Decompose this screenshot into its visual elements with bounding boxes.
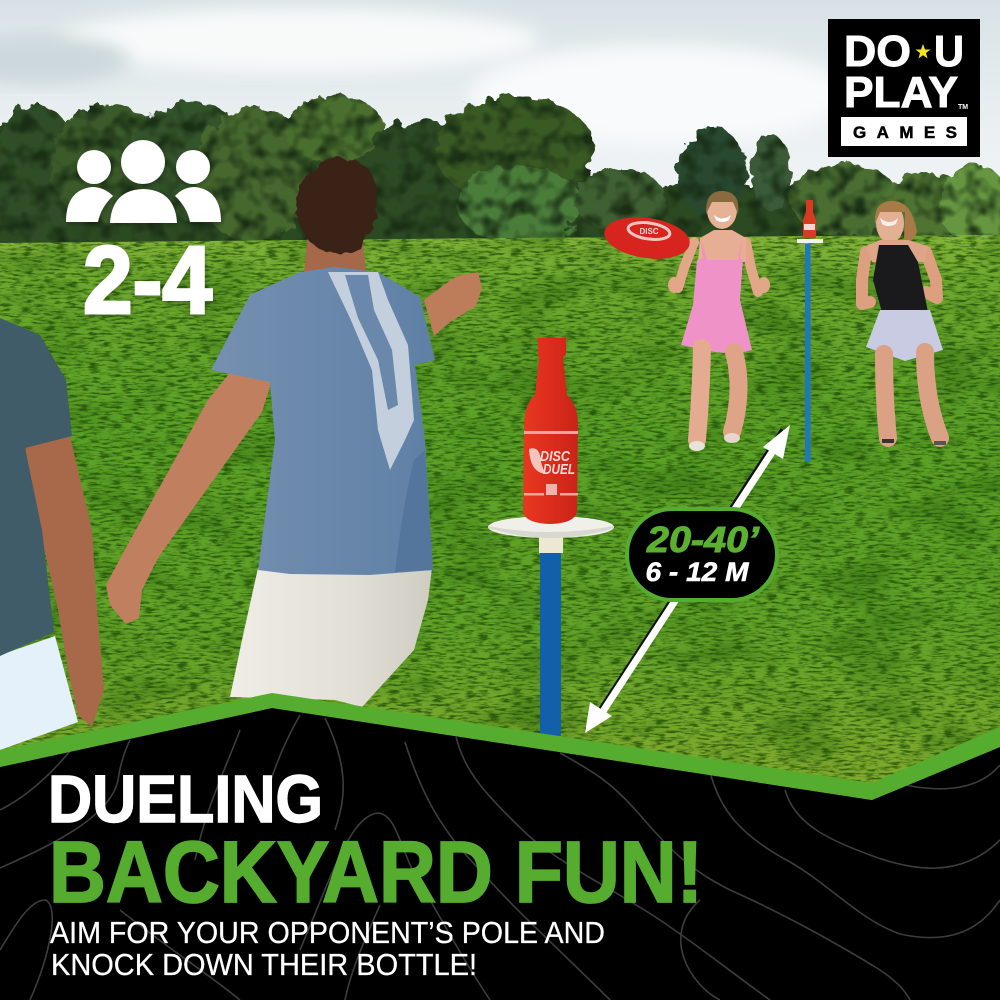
flying disc (602, 212, 692, 264)
photo background: sky (0, 0, 1000, 260)
distance badge (627, 509, 777, 600)
photo background: grass field (0, 234, 1000, 800)
bottom black panel (0, 708, 1000, 1000)
near player: man at left edge (0, 318, 104, 750)
brand logo: PLAY (844, 68, 958, 117)
photo background: tree line (0, 96, 1000, 250)
near target disc (488, 516, 614, 538)
description text: AIM FOR YOUR OPPONENT’S POLE AND (50, 915, 605, 950)
distance in feet: 20-40’ (646, 519, 760, 560)
brand logo: TM (958, 104, 968, 111)
flying disc: DISC (639, 227, 659, 236)
near red bottle: DUEL (543, 461, 575, 478)
player count number: 2-4 (83, 227, 212, 334)
green chevron band (0, 693, 1000, 800)
distance arrow (585, 425, 790, 733)
brand logo: GAMES (853, 123, 957, 142)
near pole (539, 537, 563, 736)
description text (50, 915, 605, 982)
heading line two: BACKYARD FUN! (49, 824, 703, 921)
far player: woman in pink dress (668, 191, 770, 451)
near player: thrower in blue shirt (106, 158, 482, 707)
brand logo: U (934, 27, 964, 76)
brand logo: DO (844, 27, 911, 76)
brand logo (828, 19, 980, 157)
far pole with bottle (797, 200, 823, 462)
player count icon (66, 140, 221, 223)
contour pattern (0, 715, 1000, 1000)
description text: KNOCK DOWN THEIR BOTTLE! (51, 947, 477, 982)
near red bottle (523, 338, 578, 524)
near red bottle: DISC (540, 448, 571, 465)
far player: woman in black top (862, 201, 946, 445)
heading line one: DUELING (48, 762, 323, 837)
distance badge: 6 - 12 M (646, 557, 749, 587)
